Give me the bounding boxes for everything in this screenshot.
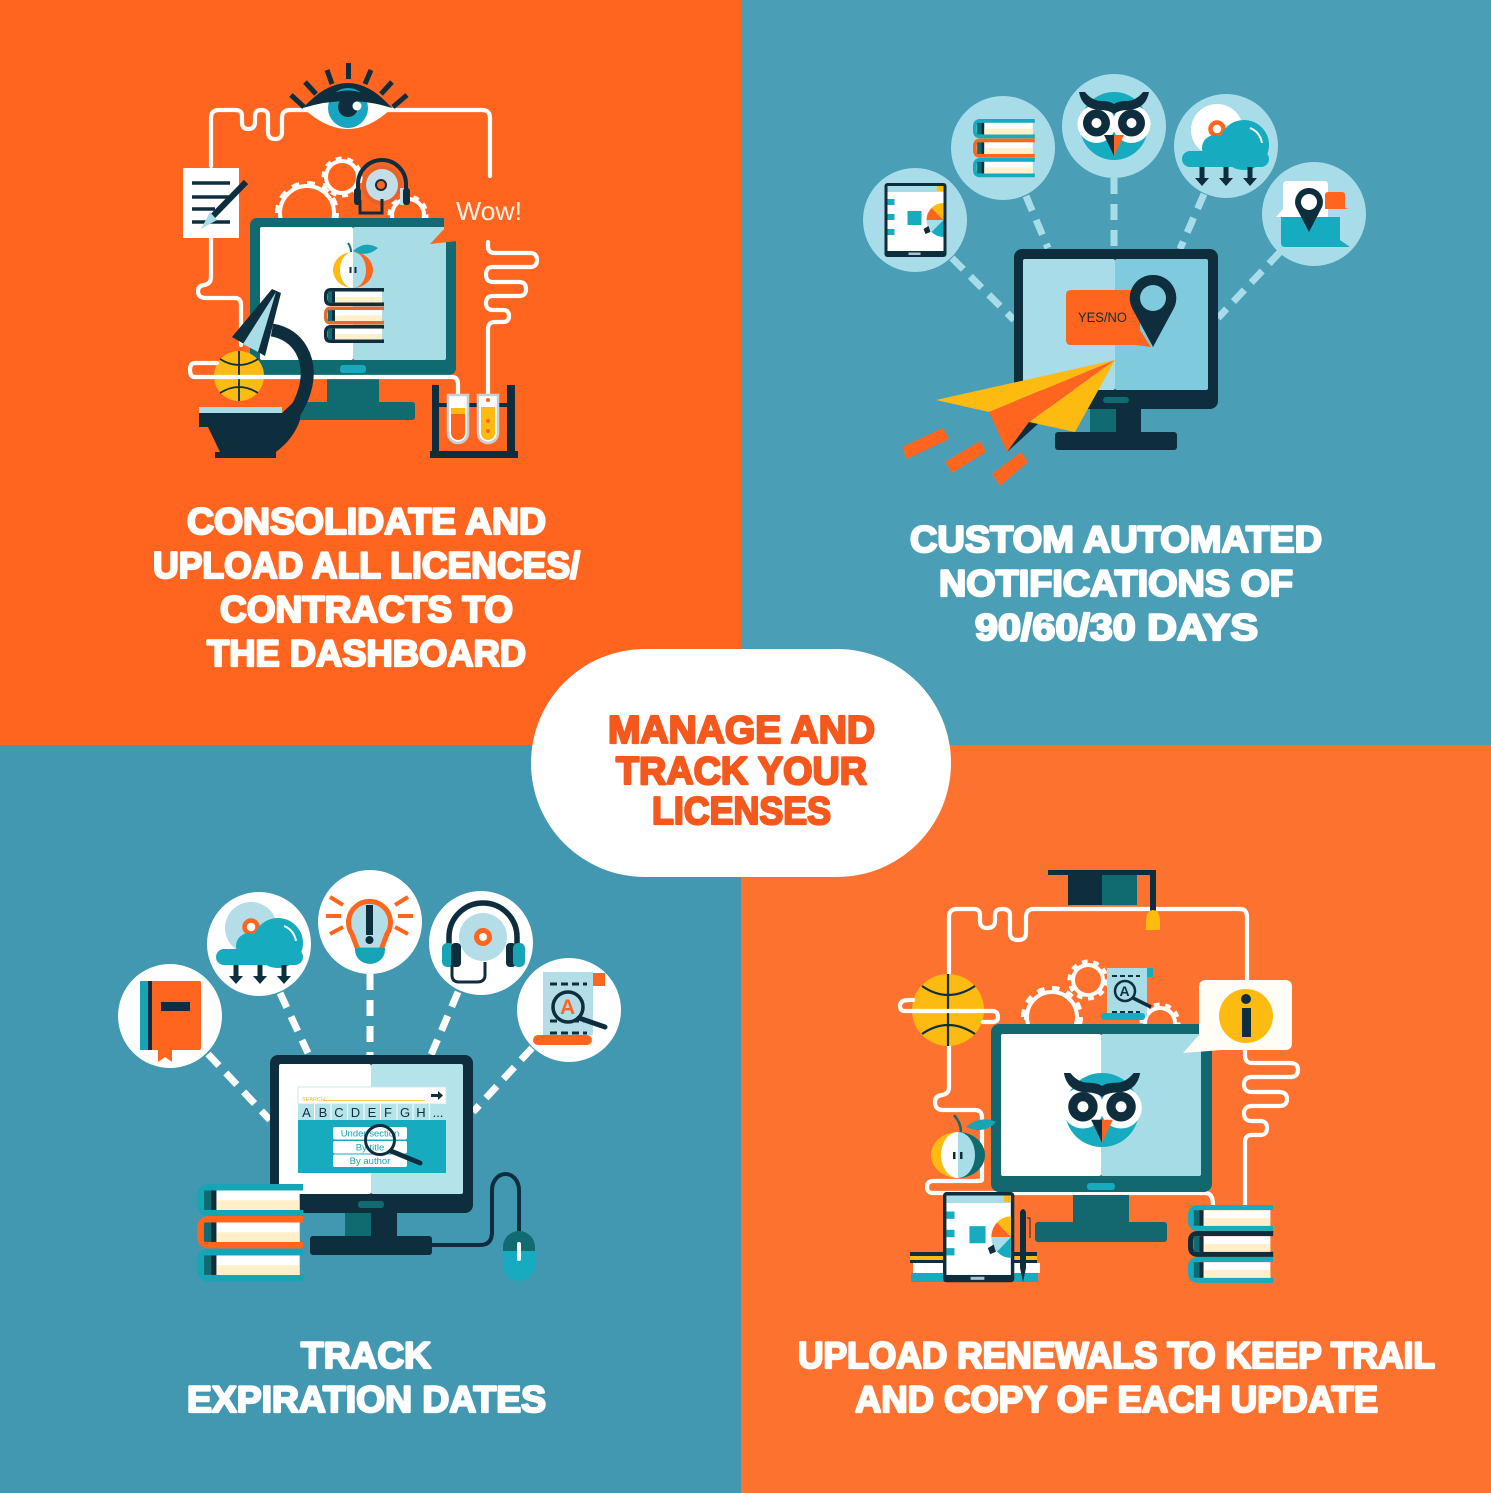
icon: headset circle (429, 891, 533, 995)
text: Wow!: Wow! (456, 196, 522, 226)
search interface: By title (356, 1142, 384, 1154)
search interface: G (400, 1105, 410, 1120)
icon: scroll circle: A (560, 996, 575, 1019)
heading: consolidate: THE DASHBOARD (207, 633, 526, 674)
icon: apple (333, 243, 378, 288)
search interface: H (416, 1105, 426, 1120)
monitor (250, 218, 458, 420)
heading: track expiration dates (187, 1335, 546, 1420)
icon: owl circle (1062, 74, 1166, 178)
illustration: monitor with eye, wires and microscope (183, 63, 537, 458)
icon: basketball (900, 974, 998, 1046)
title: TRACK YOUR (616, 750, 867, 793)
heading: track expiration dates: EXPIRATION DATES (187, 1379, 546, 1420)
heading: custom notifications: 90/60/30 DAYS (975, 607, 1258, 648)
monitor (991, 1024, 1212, 1242)
icon: stack of books (1191, 1208, 1273, 1280)
heading: custom notifications: NOTIFICATIONS OF (939, 563, 1293, 604)
search interface (298, 1087, 446, 1173)
heading: track expiration dates: TRACK (301, 1335, 431, 1376)
center badge: manage and track (531, 649, 951, 877)
speech bubble: yes/no (1066, 275, 1176, 347)
title: MANAGE AND (608, 709, 875, 752)
icon: document and pencil (183, 168, 246, 238)
icon: light bulb circle (318, 870, 422, 974)
icon: apple (931, 1115, 996, 1178)
icon: stack of books (200, 1187, 303, 1278)
heading: custom notifications (910, 519, 1322, 648)
icon: stack of books (326, 290, 384, 341)
speech bubble: info (1183, 980, 1292, 1053)
heading: consolidate: CONTRACTS TO (220, 589, 513, 630)
panel: upload renewals (741, 745, 1491, 1493)
icon: eye (291, 63, 407, 129)
heading: consolidate: CONSOLIDATE AND (187, 501, 546, 542)
panel: track expiration dates (0, 745, 741, 1493)
icon: scroll (1101, 968, 1153, 1020)
stack of flat books (910, 1252, 1040, 1282)
heading: custom notifications: CUSTOM AUTOMATED (910, 519, 1322, 560)
illustration: notification hub (863, 74, 1366, 486)
illustration: monitor with owl and wires (900, 870, 1298, 1282)
icon: tablet (943, 1192, 1014, 1282)
panel: custom notifications (741, 0, 1491, 745)
icon: test tube rack (430, 385, 518, 458)
search interface: Under section (341, 1128, 399, 1140)
icon: scroll circle (517, 958, 621, 1062)
heading: consolidate (153, 501, 580, 674)
icon: microscope (199, 289, 307, 458)
search interface: F (384, 1105, 392, 1120)
search interface: By author (350, 1156, 390, 1167)
icon: pen (1020, 1209, 1030, 1282)
icon: paper plane (902, 360, 1115, 486)
icon: scroll: A (1120, 983, 1130, 999)
heading: consolidate: UPLOAD ALL LICENCES/ (153, 545, 580, 586)
icon: books circle (951, 96, 1055, 200)
search interface: SEARCH (302, 1097, 325, 1103)
icon: owl (1062, 1073, 1142, 1147)
icon: tablet circle (863, 168, 967, 272)
title (608, 709, 875, 833)
search interface: E (368, 1105, 377, 1120)
monitor (1014, 249, 1218, 450)
search interface: C (334, 1105, 344, 1120)
gears (1024, 962, 1178, 1045)
icon: basketball (214, 351, 264, 401)
icon: cloud circle (1174, 94, 1278, 198)
monitor (270, 1055, 473, 1255)
search interface: A (302, 1105, 311, 1120)
illustration: search hub (118, 870, 621, 1281)
icon: notebook circle (118, 964, 222, 1068)
gears (278, 159, 426, 242)
icon: location chat circle (1262, 162, 1366, 266)
icon: graduation cap (1048, 870, 1160, 930)
icon: mouse (432, 1174, 535, 1281)
speech bubble: yes/no: YES/NO (1078, 310, 1127, 325)
heading: upload renewals: AND COPY OF EACH UPDATE (855, 1379, 1378, 1420)
icon: cloud circle (207, 892, 311, 996)
heading: upload renewals (798, 1335, 1435, 1420)
search interface: B (319, 1105, 327, 1120)
search interface: ... (433, 1105, 443, 1120)
title: LICENSES (652, 790, 831, 833)
search interface: D (351, 1105, 360, 1120)
heading: upload renewals: UPLOAD RENEWALS TO KEEP TRAIL (798, 1335, 1435, 1376)
panel: consolidate and upload (0, 0, 741, 745)
icon: headset (354, 160, 410, 213)
